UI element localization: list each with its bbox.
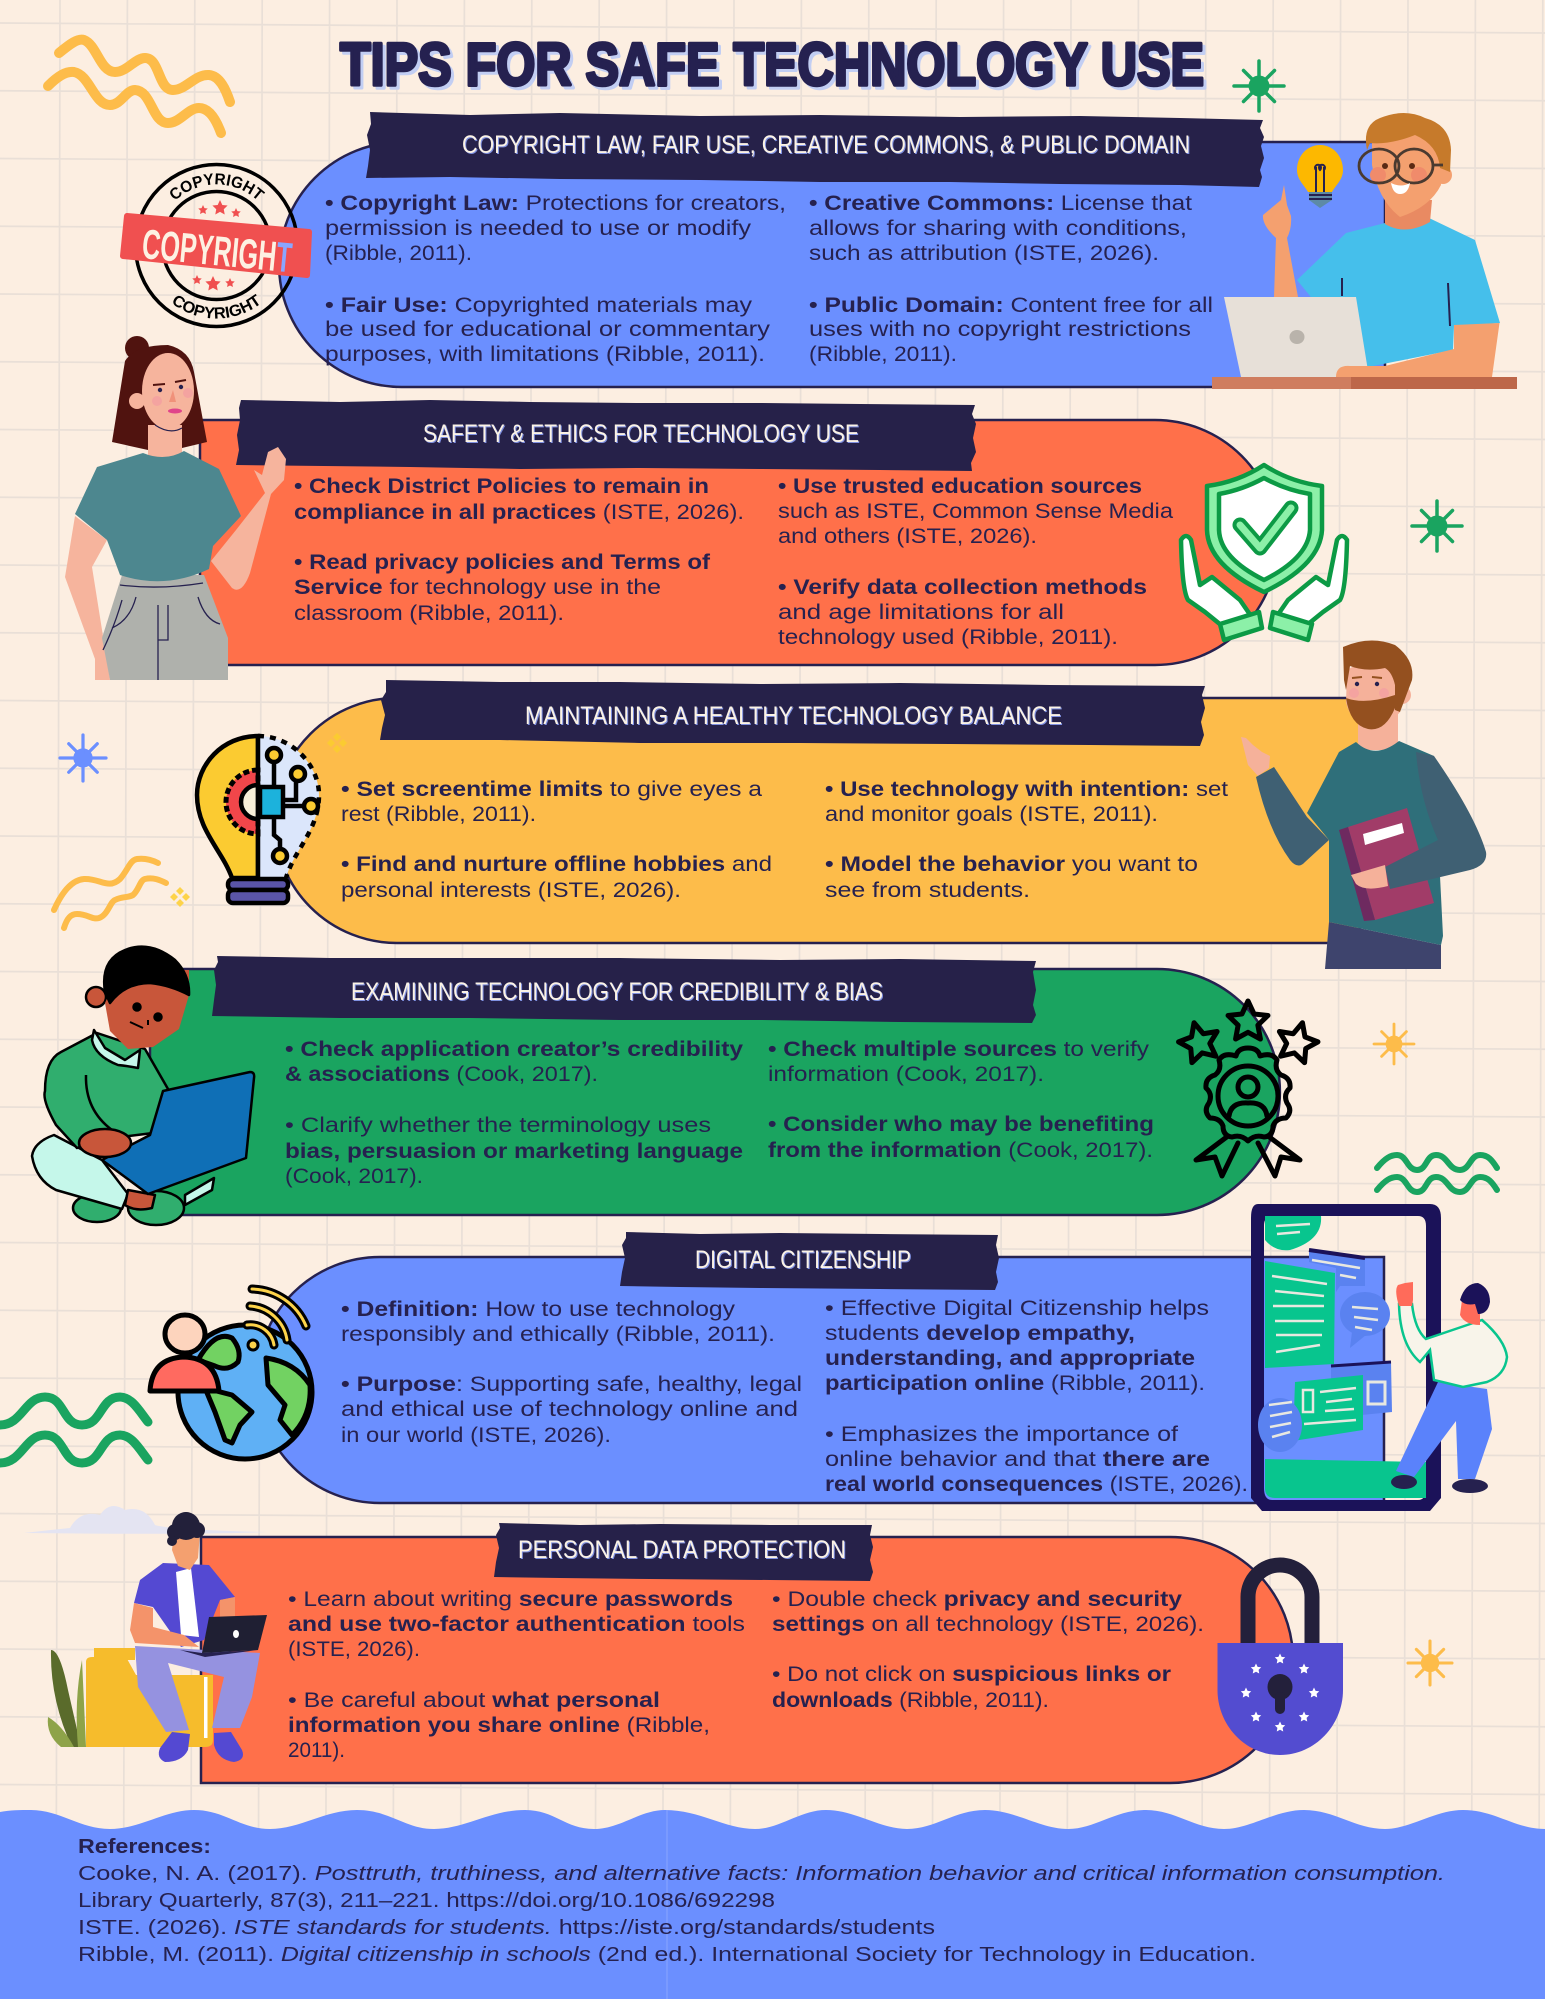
- illustration: phone with person and social posts: [1251, 1204, 1507, 1511]
- text: left column: permission is needed to use or modify: [325, 217, 752, 240]
- text: left column: [341, 1298, 802, 1447]
- curly hair: [167, 1512, 205, 1546]
- book: [1348, 808, 1434, 920]
- text: left column: [288, 1588, 745, 1762]
- decoration: green sparkle: [1412, 501, 1462, 551]
- section header bar: MAINTAINING A HEALTHY TECHNOLOGY BALANCE: [525, 702, 1062, 730]
- text: right column: downloads (Ribble, 2011).: [772, 1689, 1049, 1712]
- decoration: green wave right: [1377, 1155, 1497, 1192]
- text: right column: allows for sharing with conditions,: [809, 217, 1187, 240]
- text: left column: • Learn about writing secure passwords: [288, 1588, 733, 1611]
- text: right column: such as attribution (ISTE, 2026).: [809, 242, 1159, 265]
- section header bar: [236, 400, 976, 471]
- decoration: green sparkle top right: [1234, 61, 1284, 111]
- text: right column: [768, 1038, 1154, 1162]
- ear: [86, 987, 106, 1007]
- person hand: [1396, 1282, 1413, 1306]
- text: left column: & associations (Cook, 2017).: [285, 1063, 598, 1086]
- text: left column: [325, 192, 786, 366]
- teal t-shirt: [75, 451, 241, 581]
- text: left column: and use two-factor authentication tools: [288, 1613, 745, 1636]
- lower blue card and note: [1331, 1362, 1392, 1418]
- icon: copyright stamp: COPYRIGHT: [173, 294, 259, 319]
- panel background green: [150, 969, 1280, 1215]
- text: right column: • Double check privacy and security: [772, 1588, 1182, 1611]
- text: right column: online behavior and that there are: [825, 1448, 1210, 1471]
- text: right column: understanding, and appropriate: [825, 1347, 1195, 1370]
- green screen bottom: [1265, 1459, 1426, 1498]
- raised hand: [1241, 737, 1270, 776]
- illustration: bearded man holding a book: [1241, 640, 1486, 969]
- panel: healthy technology balance: [54, 640, 1486, 969]
- decoration: cloud: [24, 1506, 268, 1534]
- table: [1212, 377, 1351, 389]
- face: [1372, 135, 1441, 217]
- right arm and hand: [211, 447, 286, 590]
- icon: padlock with stars: [1218, 1565, 1343, 1755]
- text: left column: purposes, with limitations (Ribble, 2011).: [325, 343, 765, 366]
- text: left column: • Set screentime limits to give eyes a: [341, 778, 762, 801]
- hair: [125, 336, 149, 360]
- text: left column: compliance in all practices (ISTE, 2026).: [294, 501, 744, 524]
- panel: personal data protection: [24, 1506, 1452, 1783]
- big green note: [1265, 1261, 1335, 1368]
- hands: [79, 1129, 131, 1157]
- decoration: yellow sparkle: [1374, 1024, 1414, 1064]
- text: right column: [825, 1297, 1248, 1496]
- icon: copyright stamp: [120, 162, 312, 328]
- text: left column: (ISTE, 2026).: [288, 1638, 420, 1661]
- collar: [92, 1030, 140, 1068]
- text: left column: bias, persuasion or marketing language: [285, 1140, 743, 1163]
- panel: copyright law: [120, 112, 1517, 389]
- text: right column: • Do not click on suspicious links or: [772, 1663, 1171, 1686]
- hair: [104, 947, 189, 1003]
- pants: [1325, 922, 1441, 969]
- glasses: [1359, 149, 1443, 183]
- section header bar: [620, 1232, 999, 1290]
- text: left column: rest (Ribble, 2011).: [341, 803, 536, 826]
- laptop: [202, 1615, 267, 1653]
- person sweater and arm: [1399, 1304, 1507, 1387]
- blue cards: [1309, 1250, 1365, 1292]
- text: right column: • Consider who may be benefiting: [768, 1113, 1154, 1136]
- blue wave background: [0, 1810, 1545, 1999]
- text: right column: • Verify data collection methods: [778, 576, 1147, 599]
- text: right column: • Public Domain: Content free for all: [809, 294, 1213, 317]
- text: left column: [341, 778, 772, 902]
- text: right column: and others (ISTE, 2026).: [778, 525, 1037, 548]
- text: right column: • Use trusted education sources: [778, 475, 1142, 498]
- references text: [78, 1835, 1445, 1966]
- grey trousers: [102, 575, 228, 680]
- blue t-shirt: [1297, 218, 1500, 367]
- right sleeve: [1385, 752, 1486, 889]
- teal sweater: [1307, 741, 1443, 945]
- text: right column: from the information (Cook, 2017).: [768, 1139, 1153, 1162]
- text: right column: settings on all technology (ISTE, 2026).: [772, 1613, 1204, 1636]
- text: right column: and monitor goals (ISTE, 2011).: [825, 803, 1158, 826]
- person head: [1460, 1300, 1480, 1325]
- text: right column: real world consequences (ISTE, 2026).: [825, 1473, 1248, 1496]
- text: left column: (Cook, 2017).: [285, 1165, 423, 1188]
- references text: ISTE. (2026). ISTE standards for students. https://iste.org/standards/students: [78, 1916, 935, 1939]
- text: right column: see from students.: [825, 879, 1030, 902]
- text: right column: • Creative Commons: License that: [809, 192, 1192, 215]
- panel background yellow: [274, 698, 1360, 943]
- panel: digital citizenship: [0, 1204, 1507, 1511]
- section header bar: [212, 956, 1036, 1023]
- text: left column: • Be careful about what personal: [288, 1689, 660, 1712]
- plant: [51, 1650, 81, 1747]
- icon: globe with person and wifi: [150, 1289, 312, 1459]
- decoration: yellow sparkle: [1408, 1641, 1452, 1685]
- decoration: blue sparkle: [60, 735, 106, 781]
- title: TIPS FOR SAFE TECHNOLOGY USE: [340, 31, 1204, 98]
- other arm: [1336, 323, 1500, 377]
- decoration: green wave left: [0, 1397, 148, 1463]
- hair: [1366, 113, 1451, 172]
- text: left column: • Check application creator’s credibility: [285, 1038, 743, 1061]
- text: right column: • Effective Digital Citizenship helps: [825, 1297, 1209, 1320]
- text: right column: [778, 475, 1173, 649]
- text: left column: • Purpose : Supporting safe, healthy, legal: [341, 1373, 802, 1396]
- icon: award badge with stars: [1175, 1001, 1322, 1176]
- green feet: [73, 1194, 121, 1222]
- left arm: [65, 516, 110, 680]
- section header bar: EXAMINING TECHNOLOGY FOR CREDIBILITY & BIAS: [351, 978, 883, 1006]
- text: left column: [294, 475, 744, 625]
- arm pointing up: [1263, 185, 1298, 297]
- shoes: [159, 1732, 190, 1762]
- text: left column: • Check District Policies to remain in: [294, 475, 709, 498]
- text: right column: [772, 1588, 1204, 1712]
- text: left column: • Fair Use: Copyrighted materials may: [325, 294, 753, 317]
- laptop: [102, 1072, 254, 1194]
- icon: copyright stamp: COPYRIGHT: [170, 173, 266, 199]
- trousers: [135, 1646, 260, 1732]
- text: left column: Service for technology use in the: [294, 576, 661, 599]
- sweater: [44, 1033, 168, 1148]
- text: right column: technology used (Ribble, 2011).: [778, 626, 1118, 649]
- blue speech bubble: [1340, 1292, 1390, 1336]
- text: left column: classroom (Ribble, 2011).: [294, 602, 564, 625]
- panel background orange: [200, 420, 1277, 665]
- decoration: yellow squiggle: [54, 859, 166, 928]
- section header bar: SAFETY & ETHICS FOR TECHNOLOGY USE: [423, 420, 859, 448]
- text: left column: responsibly and ethically (Ribble, 2011).: [341, 1323, 775, 1346]
- text: left column: • Find and nurture offline hobbies and: [341, 853, 772, 876]
- bottom left bubble: [1258, 1398, 1302, 1452]
- references text: Ribble, M. (2011). Digital citizenship in schools (2nd ed.). International Society for Technology in Education.: [78, 1943, 1256, 1966]
- decoration: small yellow diamond: [170, 887, 190, 907]
- person pants: [1396, 1382, 1492, 1479]
- neck: [1385, 200, 1432, 230]
- section header bar: [494, 1523, 873, 1581]
- references text: Library Quarterly, 87(3), 211–221. https://doi.org/10.1086/692298: [78, 1889, 775, 1912]
- mint trousers: [32, 1135, 128, 1209]
- text: left column: [285, 1038, 743, 1188]
- text: left column: • Clarify whether the terminology uses: [285, 1114, 711, 1137]
- text: right column: participation online (Ribble, 2011).: [825, 1372, 1205, 1395]
- icon: half gear half circuit light bulb: [197, 736, 319, 903]
- white undershirt: [176, 1568, 199, 1637]
- hand on book: [1351, 865, 1388, 889]
- illustration: man with glasses at laptop: [1212, 113, 1517, 389]
- text: left column: personal interests (ISTE, 2026).: [341, 879, 681, 902]
- left sleeve: [1256, 767, 1329, 866]
- hair and beard: [1343, 640, 1412, 712]
- text: right column: (Ribble, 2011).: [809, 343, 957, 366]
- head: [172, 1532, 200, 1570]
- illustration: man with laptop sitting on a folder: [48, 1512, 267, 1762]
- text: right column: • Use technology with intention: set: [825, 778, 1228, 801]
- light bulb: [1297, 145, 1343, 192]
- decoration: faint diamond on panel: [327, 733, 347, 753]
- section header bar: PERSONAL DATA PROTECTION: [518, 1536, 846, 1564]
- text: right column: information (Cook, 2017).: [768, 1063, 1044, 1086]
- text: left column: • Copyright Law: Protections for creators,: [325, 192, 786, 215]
- person shoes: [1391, 1475, 1417, 1489]
- references band: [0, 1810, 1545, 1999]
- icon: shield with caring hands: [1181, 465, 1347, 640]
- text: left column: (Ribble, 2011).: [325, 242, 472, 265]
- panel: safety and ethics: [65, 336, 1462, 680]
- neck: [1358, 700, 1398, 750]
- section header bar: DIGITAL CITIZENSHIP: [695, 1246, 911, 1274]
- panel background blue: [257, 1257, 1384, 1503]
- text: left column: and ethical use of technology online and: [341, 1398, 798, 1421]
- phone frame: [1251, 1204, 1441, 1511]
- text: right column: • Model the behavior you want to: [825, 853, 1198, 876]
- text: left column: be used for educational or commentary: [325, 318, 771, 341]
- references text: References:: [78, 1835, 211, 1858]
- icon: copyright stamp: COPYRIGHT: [140, 220, 294, 281]
- text: right column: students develop empathy,: [825, 1322, 1135, 1345]
- text: right column: and age limitations for all: [778, 601, 1064, 624]
- text: left column: in our world (ISTE, 2026).: [341, 1424, 611, 1447]
- references text: Cooke, N. A. (2017). Posttruth, truthiness, and alternative facts: Information behavior and critical information consumption.: [78, 1862, 1445, 1885]
- arm: [130, 1603, 199, 1647]
- illustration: woman waving: [65, 336, 286, 680]
- panel background orange: [201, 1537, 1293, 1783]
- panel: credibility and bias: [32, 947, 1497, 1225]
- neck and face: [148, 425, 182, 460]
- section header bar: [366, 112, 1264, 187]
- text: right column: [825, 778, 1228, 902]
- face: [1346, 662, 1400, 728]
- illustration: boy with laptop: [32, 947, 254, 1225]
- text: right column: uses with no copyright restrictions: [809, 318, 1191, 341]
- folder: [94, 1648, 135, 1660]
- laptop: [1224, 297, 1369, 377]
- purple shirt: [134, 1563, 235, 1647]
- section header bar: [380, 680, 1205, 746]
- section header bar: COPYRIGHT LAW, FAIR USE, CREATIVE COMMONS, & PUBLIC DOMAIN: [462, 131, 1190, 159]
- decoration: yellow squiggle top left: [48, 40, 230, 133]
- text: left column: • Read privacy policies and Terms of: [294, 551, 711, 574]
- green speech bubble: [1265, 1216, 1321, 1250]
- text: right column: • Emphasizes the importance of: [825, 1423, 1178, 1446]
- panel background blue: [279, 142, 1385, 387]
- text: left column: 2011).: [288, 1739, 345, 1762]
- text: left column: information you share online (Ribble,: [288, 1714, 710, 1737]
- text: right column: such as ISTE, Common Sense Media: [778, 500, 1173, 523]
- text: right column: [809, 192, 1213, 366]
- text: left column: • Definition: How to use technology: [341, 1298, 736, 1321]
- text: right column: • Check multiple sources to verify: [768, 1038, 1150, 1061]
- face: [105, 970, 189, 1049]
